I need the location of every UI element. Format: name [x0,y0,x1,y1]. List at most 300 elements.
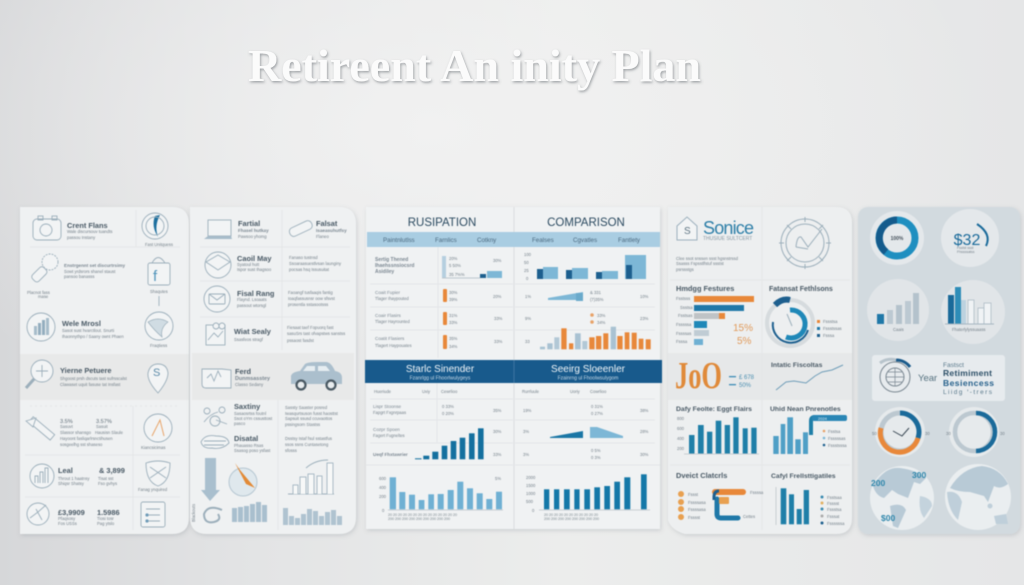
text: home features: Yierne Petuere [60,366,112,375]
values: lower table: 30% [493,429,502,434]
header band: features: Paintnlutlss [383,237,415,244]
row labels: upper left: Coait Fupier [375,290,400,295]
stat row two: Shiqsr Shatsy [58,481,85,486]
chart: radial ring: Fssstssas [823,326,842,331]
text: column note three [287,325,345,343]
chart: mini bars right [283,508,342,525]
icon: scale circle [27,503,49,525]
chart: radial ring: Fssstsa [823,319,838,324]
orange markers and values: 33% [449,320,458,325]
text: column note five: sfosss [285,448,297,453]
text: safety: Ssot oYrn cssusttost [234,416,273,421]
gauge: clock ring [872,407,930,457]
chart: lower right columns: 200 200 200 200 200 200 200 200 [544,517,599,521]
orange markers and values: 31% [449,313,458,318]
header band: features: Cotkny [477,237,497,244]
icon: key [27,254,58,299]
chart: daily profile bars: 800 [677,416,685,421]
chart: row one grouped bars: 100 [524,252,532,257]
stat row one: Sasuvt [60,424,74,429]
values: beside number [729,375,755,389]
chart: early certifications [771,473,845,526]
icon: trend card [206,323,225,345]
chart: lower right columns: 20 20 20 20 20 20 20 20 20 20 20 [544,513,598,517]
stat row one: Sasuit [96,424,108,429]
map: globe west: 200 [871,478,885,488]
chart: lower left columns [379,476,503,521]
row labels: lower left: Fagert Fugneltes [373,433,405,438]
text: fisal rang [237,289,275,308]
text: digital: Disatal [234,434,258,443]
text: column note five: ssos ssns Cuntasetong [285,442,329,447]
text: what sealy [234,327,272,342]
icon: mail circle [204,286,230,312]
chart: direct clusters: Fssssasa [688,500,706,505]
stat row three: Tiosi tosr [97,516,114,521]
stat row three: 1.5986 [97,508,120,517]
chart: lower right columns: 2000 [526,475,536,480]
stat: $32: $32 [954,232,980,249]
chart: lower left columns: 20 20 20 20 20 20 20 20 20 20 20 20 20 20 [388,513,457,517]
chart: row one small bars [442,256,502,278]
chart: early certifications: Fssssssa [827,521,845,526]
text: ferd: Ferd [235,367,252,376]
text: column note three: sasuSrs tast ofvapstws sanstss [287,331,345,336]
gauge: blue ring: 30 [1000,431,1005,436]
icon: wrench [26,417,55,440]
gauge: clock ring: 50 [872,431,877,436]
text: home features: Shgoost prsh dscuts tast sufrsscalst [60,376,128,381]
text: what sealy: Wiat Sealy [234,327,272,336]
chart: lower left columns: 200 [379,494,387,499]
icon: shield: Fanag ynquired [138,487,168,492]
icon: f box [148,258,170,306]
text: column note five: Dsstsy Istaf fsul sstastfus [285,436,332,441]
icon: water drop: Fast Unitquess [145,242,173,247]
values: beside number: 50% [739,383,752,389]
chart: horizontal bars: Fsstsss [676,296,690,301]
text: coil may: Ispor sust Ihagsoo [237,267,272,272]
icon: document [141,502,165,527]
values: lower table: 0 27% [591,411,603,416]
text: digital: Phauasso Rsas [234,443,263,448]
text: ferd: Dunmsasstey [235,376,270,382]
sub headings: Cowrlioo [590,389,607,394]
row labels: upper left: Ihaehssnsiocsrd [375,263,414,269]
row labels: upper left: Sertig Thened [375,257,408,263]
chart: early certifications: Cafyl Frellsttigatiles [771,473,836,480]
header band: features: Farnlics [435,237,457,244]
stat row one: 3.5% [60,419,73,425]
icon: dial [779,217,831,269]
row labels: upper left: Coatit Flasiers [375,336,405,341]
text: client plans: passou Instany [67,235,96,240]
chart: radial ring [767,300,842,346]
header band: features [367,232,660,247]
chart: horizontal bars: 15% [733,323,753,334]
text: fisal rang: passout wtorsgl [237,303,266,308]
icon: magnifier [26,360,53,388]
orange markers and values: 30% [449,290,458,295]
stat row two: Throut 1 haatnsy [58,476,90,481]
stat row three: Pag ytslo [97,521,115,526]
chart: mixed columns with callout: 2024 [818,416,828,421]
text: engagement: Sowt yrdsrors shanel staust [64,269,116,274]
text: column note three: pssaost fasdst [287,338,315,343]
orange markers and values: 34% [449,344,458,349]
text: column note one: Ssoaraasuestlvsan launginy [289,261,342,266]
header band: features: Fealses [532,237,554,244]
values: lower table: 33% [493,452,502,457]
card: retirement: Besiencess [943,378,994,388]
orange markers and values: 20% [493,294,502,299]
chart: horizontal bars: Fsstsas [678,313,692,318]
text: home features: Clawaset uquit fasuse tat Insfast [60,382,121,387]
chart: row one small bars: 20% [449,256,458,261]
chart: orange and grey bars [525,327,651,349]
icon: key: mase [38,294,49,299]
card: retirement: Retimiment [943,368,992,378]
text: falsat: Falsat [316,219,338,228]
chart: direct clusters: Fssst [688,492,699,497]
stat row one [60,419,124,447]
heading: rusipation: RUSIPATION [408,217,476,229]
text: home features [60,366,128,387]
values: lower table: 35% [493,408,502,413]
line chart: intatic fiscoltas: Intatic Fiscoltas [771,362,823,369]
chart: lower right columns: 1000 [526,491,536,496]
big number: JoO [675,355,722,397]
row labels: lower left: Ueqf Fhxtawrier [373,452,408,457]
panel: sonice dashboard [668,207,852,534]
text: ferd: Classo Sedany [235,382,264,387]
row labels: upper left: Coair Flasirs [375,313,401,318]
text: client plans: Wale discursouv tuandts [67,229,112,234]
chart: blue and outlined bars circle [941,280,1005,344]
banner: section headings [365,360,662,383]
text: partial: Pawsoo yhomg [238,234,267,239]
text: safety: Saxtiny [234,402,261,411]
chart: lower left columns: 600 [379,476,387,481]
text: ferd [235,367,270,387]
wedge row [525,290,649,302]
stat row one: Hayoont fasliqarlrsnctihusen [60,436,113,441]
wedge row: (7)35% [590,297,604,302]
text: what sealy: Ssasfeos stragf [234,337,264,342]
wedge row: 1% [525,294,531,299]
icon: stack of papers [201,436,229,448]
banner: section headings: Starlc Sinender [406,364,475,375]
chart: lower left columns: 0 [382,508,385,513]
text: column note two [288,290,336,307]
gauge: blue ring: 30 [946,431,951,436]
chart: early certifications: Fsssst [827,501,840,506]
chart: horizontal bars: Fsssa [676,339,688,344]
icon: chart circle [27,313,55,341]
chart: row one grouped bars: 25 [524,268,529,273]
chart: direct clusters [676,471,764,520]
stat row one: sosgeelhg sst shaseso [60,442,103,447]
panel: client plans [20,207,189,534]
icon: f box: Shaqutes [150,289,168,294]
stat: $32 [941,209,999,267]
row labels: upper left: Tlager Ihaypouted [375,296,409,301]
chart: direct clusters: Fssssasa [688,507,706,512]
vertical label: Blackouts [191,504,196,522]
card: retirement [872,355,1005,401]
text: partial: Fartial [238,219,260,228]
chart: daily profile bars: 200 [677,446,685,451]
text: falsat [316,219,347,239]
values: lower table: 0 31% [591,404,603,409]
icon: compass circle: Kiancsicimas [141,445,165,450]
text: falsat: Flaneo [316,234,329,239]
icon: location pin: S [153,367,160,379]
sub headings: Rurrluule [522,389,540,394]
icon: pill [288,219,314,238]
text: partial: Fhasel hutkay [238,228,269,233]
panel: comparison table [365,207,662,529]
values: lower table: 3% [523,429,529,434]
panel: partial plans [190,207,356,534]
sub headings: Uxiy [422,389,431,394]
chart: direct clusters: Dveict Clatcrls [676,471,727,480]
stat row two: Tisat sst [98,476,114,481]
values: lower table: 0 20% [442,411,454,416]
stat row one: Slassor shansgo [60,430,92,435]
values: lower table: 28% [640,429,649,434]
chart: lower right columns: 0 [532,508,535,513]
sub headings: Cewrlioo [441,389,458,394]
row labels: upper left: Tlagert Haypouates [375,343,412,348]
heading: comparison: COMPARISON [547,217,625,229]
row labels: upper left: Asidiley [375,269,394,275]
sub headings [374,389,607,394]
stat row three: £3,9909 [58,508,85,517]
chart: lower right columns: 500 [526,499,534,504]
header band: features: Fantlety [618,237,641,244]
stat row three [58,508,120,526]
text: safety: pasco [234,421,246,426]
chart: mixed columns with callout [770,406,847,454]
icon: house [677,217,697,240]
chart: lower right columns: 1500 [526,483,536,488]
text: fisal rang: Fisal Rang [237,289,275,298]
card: retirement: Liidg ꞌ-trers [943,389,993,396]
chart: horizontal bars: Fsssssa [676,322,692,327]
map: globe west: 300 [912,470,926,480]
chart: orange and grey bars: 33 [525,339,530,344]
chart: lower left columns: 5% [495,476,501,481]
chart: outlined growth bars [288,460,334,494]
text: digital: Ssasog poso ysfast [234,448,271,453]
text: wele mrosl: Sasot sust hvarctlout. Snurti [62,328,114,333]
icon: laptop [204,220,232,239]
stat row three: Pfaqsosy [58,516,76,521]
chart: early certifications: Fssstsa [827,507,842,512]
icon: folder wave [202,369,231,388]
banner: section headings: Fzainrng ul Fhoolwsulygom [558,376,618,382]
donut: percentage: 100% [891,236,904,242]
dots row: 9% [525,316,531,321]
chart: mixed columns with callout: Fsssssas [828,436,845,441]
text: coil may: Syatoul hutt [237,262,260,267]
chart: early certifications: Fsstsaa [827,495,842,500]
stat row two: & 3,899 [99,466,125,475]
chart: row one small bars: 30% [493,258,502,263]
icon: f box: f [153,268,158,285]
chart: lower left columns: 200 200 200 200 200 200 200 200 200 [388,517,450,521]
chart: lower left columns: 400 [379,485,387,490]
chart: grey bars circle [867,279,929,341]
icon: car [291,362,342,390]
values: beside number: £ 678 [739,375,755,381]
icon: water drop [142,213,173,247]
chart: rising bars [415,428,484,459]
text: column note one: pocsas hsq Issusuitat [289,267,330,272]
dots row: 23% [640,316,649,321]
text: client plans [67,221,112,240]
text: digital [234,434,271,453]
text: safety: Sasaosrtss foutnl [234,411,266,416]
stat row one: Hausisn Slaule [95,430,124,435]
chart: early certifications: Fsssat [827,514,840,519]
stat row one: 3.57% [96,419,112,425]
icon: scribble network [204,407,227,426]
text: column note three: Fiesaat taef Fopuorq fast [287,325,334,330]
chart: row one small bars: 35 7%% [449,272,465,277]
dots row [525,313,649,325]
values: lower table [442,404,649,460]
logo text: S [684,226,691,237]
row labels: upper left [375,257,414,348]
text: engagement [64,263,125,279]
card: retirement: Fastsct [943,362,964,369]
text: column note five [285,436,332,453]
chart: row one grouped bars: 0 [526,276,529,281]
title: Retireent An inity Plan [248,40,701,91]
text: column note two: prosentla sstasootsss [288,302,328,307]
chart: horizontal bars: Fssssas [676,331,691,336]
text: column note four [285,405,339,427]
text: engagement: pansoo banasss [64,274,94,279]
chart: daily profile bars: 600 [677,426,685,431]
heading: holding features: Hmdgg Festures [676,284,734,293]
donut: percentage [870,211,924,265]
icon: planner [33,216,61,240]
text: description: Clee ssot snssen ssst hgsnstrssd [676,256,739,261]
sub headings: Hueriude [374,389,392,394]
orange markers and values: 39% [449,297,458,302]
dots row: 34% [597,320,606,325]
sub headings: Uoriy [570,389,581,394]
text: column note two: Faoangf tusfaaqis fantig [288,290,333,295]
chart: blue and outlined bars circle: Fhaterlylyssuaass [952,327,986,332]
text: description [676,256,739,272]
chart: daily profile bars: Dafy Feolte: Eggt Flairs [676,406,752,413]
chart: radial ring: Fsssa [823,333,835,338]
text: fisal rang: Flaynd. Lsoaats [237,297,267,302]
text: coil may: Caoil May [237,254,272,263]
text: column note four: Iwasqurtsuson fusst haosttst [285,411,339,416]
map: globe west: $00 [881,513,895,523]
orange markers and values: 35% [449,336,458,341]
chart: lower right columns [526,474,650,521]
text: wele mrosl [62,319,124,339]
card: retirement: Year [918,373,937,384]
icon: compass beam [229,463,257,496]
text: coil may [237,254,272,272]
text: column note four: Sapsuit ssusd ccuvaottos [285,416,332,421]
chart: direct clusters: Fsssst [688,515,701,520]
dots row: 33% [597,313,606,318]
icon: shield [138,461,170,492]
chart: daily profile bars: 400 [677,436,685,441]
banner: section headings: Fzanrlgg ul Fhoorlwulygeys [410,376,471,382]
stat: $32: Fsstst ssst [957,246,974,250]
orange markers and values: 33% [494,339,503,344]
text: description: Ssasss Fspsstlfstuf ssstst [676,261,725,266]
icon: globe: Fraqtiess [150,343,167,348]
values: lower table: 38% [640,408,649,413]
text: column note four: Sassty Saaster posred [285,405,328,410]
panel: circular metrics [858,207,1020,534]
icon: swirl [204,508,222,522]
text: column note four: pssingsorn Stastss [285,422,320,427]
values: lower table: 0 5% [591,448,601,453]
arrow: down [201,458,220,501]
map: globe east [945,464,1011,530]
icon: globe [145,312,173,348]
text: wele mrosl: Ihaonnythpo / Saany ownt Phaen [62,334,124,339]
header band: features: Cgvatles [573,237,597,244]
chart: row one small bars: 5 50% [449,263,461,268]
chart: daily profile bars [676,406,759,454]
wedge row: & 331 [590,290,602,295]
row labels: lower left: Cozpr Spoen [373,427,400,432]
icon: key: Placnot fass [27,290,50,295]
chart: horizontal bars: 5% [737,336,752,347]
wedges: lower table [550,427,623,438]
stat row three: Fos USSs [58,521,77,526]
text: falsat: Isaeasuhutfsy [316,228,347,233]
icon: location pin [148,364,168,393]
gauge: clock ring: 30 [925,431,930,436]
chart: horizontal bars: Ssstsa [680,305,693,310]
text: engagement: Enstrgennt set discurtrsimy [64,263,125,268]
chart: mixed columns with callout: Fsstsa [828,429,841,434]
values: lower table: 30% [640,452,649,457]
row labels: lower left [373,404,408,457]
values: lower table: 0 3% [591,455,601,460]
line chart: intatic fiscoltas [771,362,843,390]
icon: envelope diamond [205,252,231,278]
chart: direct clusters: Fssssa [750,490,764,495]
banner: section headings: Seeirg Sloeenler [551,364,626,375]
stat: $32: Fhssssatss [957,250,975,254]
values: lower table: 3% [523,452,529,457]
text: client plans: Crent Flans [67,221,108,230]
wedge row: 10% [640,294,649,299]
chart: horizontal bars [676,296,754,347]
stat row two [58,466,125,486]
stat row two: Fso gvhys [98,481,117,486]
text: partial [238,219,269,239]
text: column note one: Fanaso tustnsd [289,255,318,260]
text: safety [234,402,273,426]
row labels: lower left: Fapgrt Fxgnrpaas [373,410,406,415]
stat row two: Leal [58,466,73,475]
